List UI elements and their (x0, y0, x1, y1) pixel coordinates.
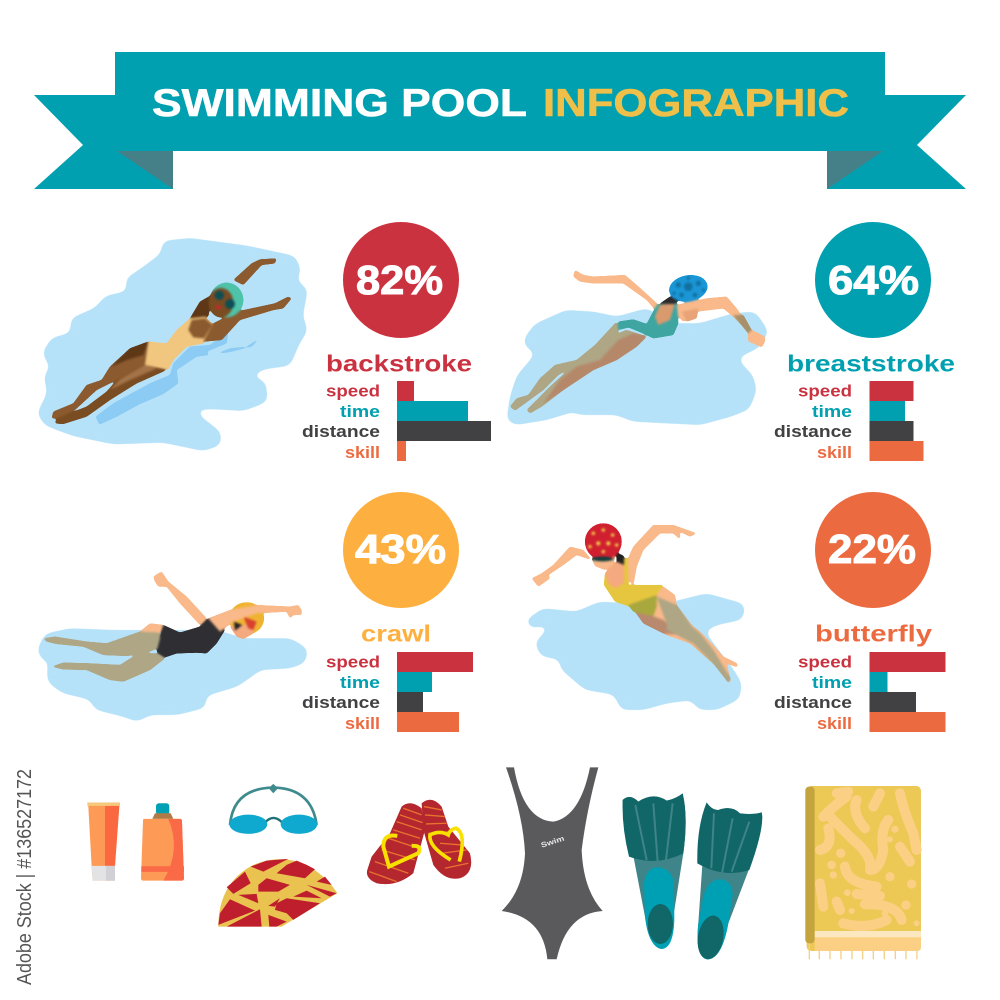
illustration: crawl swimmer (40, 572, 305, 719)
icon: left fin (623, 793, 686, 949)
panel: breaststroke (509, 222, 955, 462)
bar chart: breaststroke (774, 381, 924, 462)
percentage circle: butterfly: 22% (828, 526, 916, 572)
bar chart: crawl: distance (302, 693, 380, 712)
bar chart: breaststroke: speed (798, 382, 852, 400)
title: SWIMMING POOL (152, 82, 527, 125)
bar chart: backstroke: speed (326, 382, 380, 400)
heading: backstroke: backstroke (326, 350, 472, 376)
percentage circle: breaststroke: 64% (828, 257, 919, 303)
icon: swimsuit (502, 767, 603, 959)
bar chart: breaststroke: skill (817, 443, 852, 462)
bar chart: backstroke: distance (302, 422, 380, 441)
icon: flip flops (367, 800, 471, 884)
banner ribbon (34, 52, 966, 189)
bar chart: crawl: speed (326, 652, 380, 672)
heading: breaststroke: breaststroke (787, 350, 955, 376)
bar chart: butterfly: time (812, 673, 852, 692)
percentage circle: crawl (343, 492, 459, 608)
panel: crawl (40, 492, 473, 733)
title (152, 82, 849, 125)
bar chart: butterfly: speed (798, 652, 852, 672)
percentage circle: backstroke (343, 222, 459, 338)
title: INFOGRAPHIC (543, 82, 849, 125)
heading: crawl: crawl (361, 620, 431, 646)
illustration: breaststroke swimmer (509, 270, 766, 422)
icon: sunscreen tube (87, 803, 120, 881)
icon: beach towel (805, 786, 921, 959)
panel: butterfly (528, 492, 946, 733)
bar chart: breaststroke: time (812, 402, 852, 421)
icon: swim goggles (229, 784, 317, 834)
icon: right fin (694, 802, 762, 961)
icon: swimsuit: Swim (540, 833, 566, 850)
bar chart: butterfly: distance (774, 693, 852, 712)
illustration: backstroke swimmer (40, 241, 305, 448)
illustration: butterfly swimmer (528, 523, 742, 707)
bar chart: backstroke: time (340, 402, 380, 421)
icon: patterned swim cap (218, 859, 337, 927)
icon: sunscreen bottle (141, 803, 184, 881)
percentage circle: crawl: 43% (355, 526, 446, 572)
bar chart: crawl: skill (345, 714, 380, 733)
panel: backstroke (40, 222, 491, 462)
vertical stock credit: Adobe Stock | #136527172 (14, 769, 36, 985)
percentage circle: backstroke: 82% (356, 257, 443, 303)
bar chart: backstroke (302, 381, 491, 462)
bar chart: backstroke: skill (345, 443, 380, 462)
bar chart: crawl (302, 652, 473, 733)
bar chart: butterfly: skill (817, 714, 852, 733)
bar chart: butterfly (774, 652, 946, 733)
bar chart: crawl: time (340, 673, 380, 692)
percentage circle: breaststroke (815, 222, 931, 338)
percentage circle: butterfly (815, 492, 931, 608)
bar chart: breaststroke: distance (774, 422, 852, 441)
heading: butterfly: butterfly (815, 620, 932, 646)
